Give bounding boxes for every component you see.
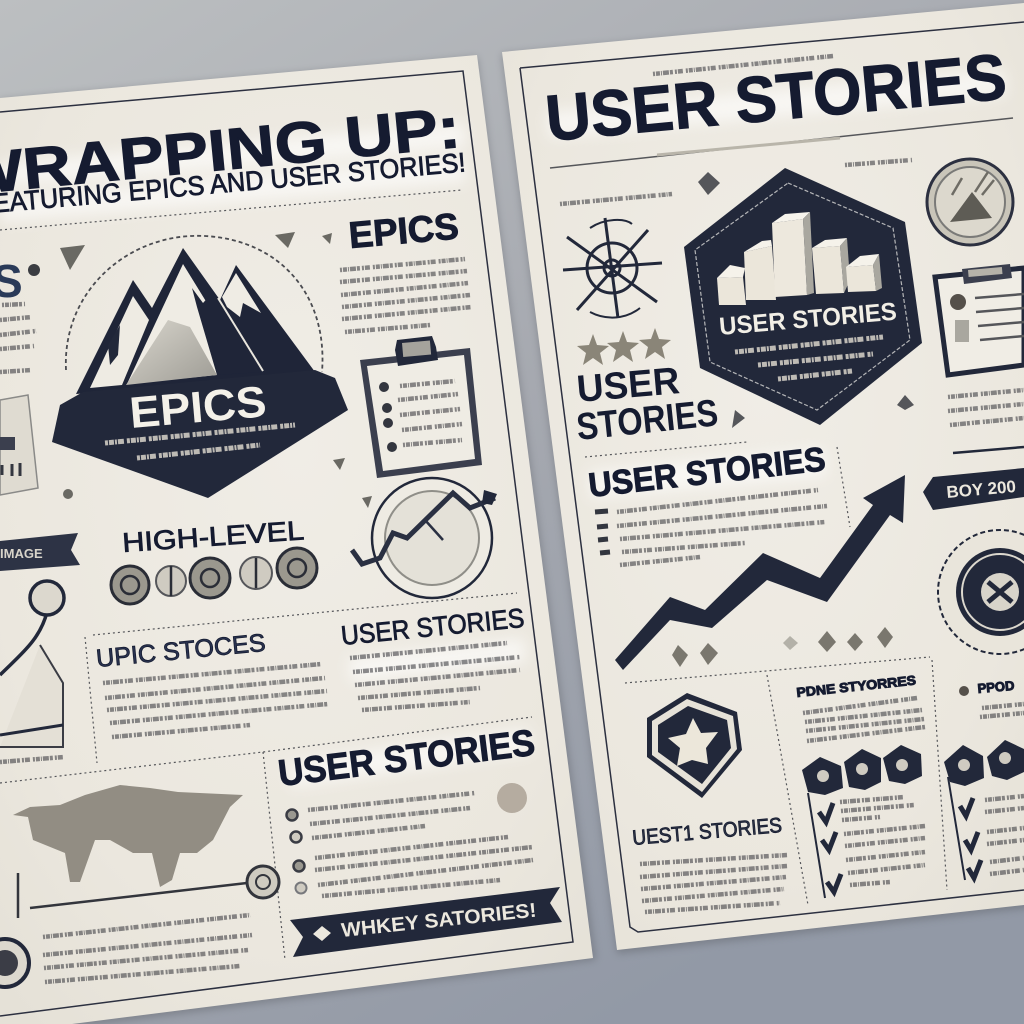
banner: key stories: [290, 887, 562, 957]
icon: corner seal: [0, 939, 29, 987]
label: epics: EPICS: [128, 377, 268, 438]
icon: round seal top right: [927, 159, 1013, 245]
banner right: BOY 200: [946, 477, 1017, 502]
banner: key stories: WHKEY SATORIES!: [340, 900, 537, 942]
icon: seal right: [938, 530, 1024, 654]
ornaments: [560, 160, 914, 428]
icon: clipboard: [360, 336, 482, 478]
heading: upic stoces: UPIC STOCES: [95, 629, 267, 673]
arrow: rising trend: [615, 475, 905, 670]
bar chart: [717, 212, 882, 305]
icon: world map: [13, 785, 279, 918]
checklist card middle: [808, 793, 925, 898]
heading: user stories stacked: USER: [575, 360, 681, 411]
icons: row of five medals: [111, 548, 317, 604]
text block: epics description: [340, 259, 472, 332]
list: user story bullets: [286, 783, 533, 896]
heading: uest stories: UEST1 STORIES: [631, 814, 783, 850]
heading: user stories stacked: [575, 360, 720, 449]
banner right: [923, 468, 1024, 510]
title: user stories: USER STORIES: [543, 40, 1009, 155]
panel: left poster: [0, 55, 596, 1024]
icon: clipboard right: [935, 264, 1024, 375]
text block: bottom left: [640, 855, 787, 912]
heading: user stories lower: USER STORIES: [276, 722, 537, 794]
heading: epics: EPICS: [347, 206, 460, 256]
text block: right of badge: [948, 390, 1024, 453]
icons: three stars: [577, 328, 671, 365]
heading: story title: PDNE STYORRES: [796, 672, 917, 700]
heading: high-level: HIGH-LEVEL: [121, 515, 305, 558]
left edge banner: IMAGE: [0, 546, 43, 561]
icon: hexagon badge: [684, 168, 922, 425]
label: user stories: USER STORIES: [718, 298, 898, 341]
small header text: [653, 56, 833, 74]
text block: story list: [803, 698, 925, 741]
icon: compass wheel: [563, 218, 662, 318]
left edge banner: [0, 533, 80, 571]
small icons below arrow: [672, 627, 893, 667]
text block: user stories description: [595, 490, 827, 565]
icon: trend chart circle: [352, 478, 497, 598]
text block: left column: [103, 664, 328, 737]
icon: mountain badge: [52, 236, 348, 498]
text block: bottom: [43, 915, 252, 982]
heading: user stories middle: USER STORIES: [340, 603, 526, 651]
right column fragments: PPOD: [977, 678, 1015, 696]
small ornaments: [60, 232, 372, 508]
text block: right column: [350, 643, 520, 710]
left edge fragments: [0, 255, 64, 762]
panel: right poster: [502, 3, 1024, 954]
icon: star shield: [647, 693, 742, 798]
right column fragments: [944, 678, 1024, 880]
heading: user stories stacked: STORIES: [575, 392, 720, 449]
icons: badges row: [802, 745, 922, 795]
heading: user stories middle: USER STORIES: [587, 440, 827, 505]
